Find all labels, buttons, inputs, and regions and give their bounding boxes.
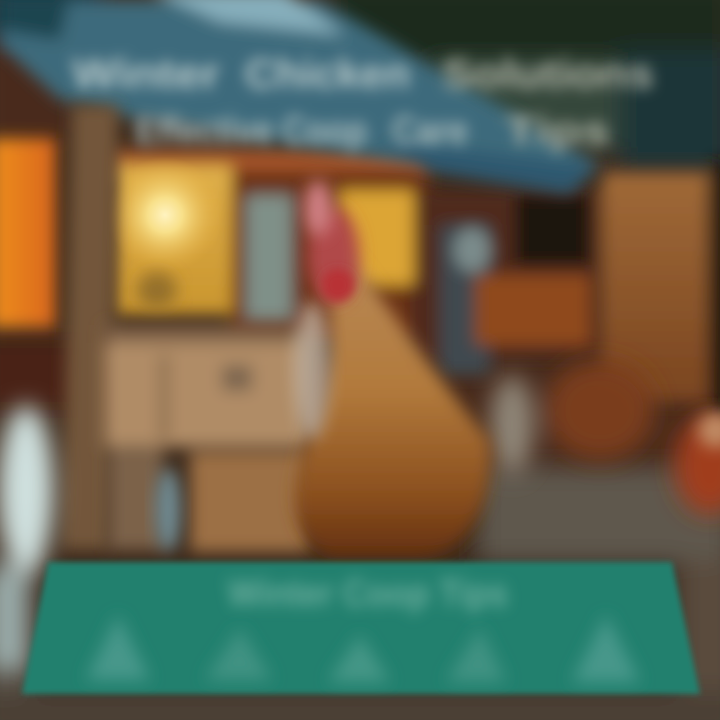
title: Care [392,109,468,153]
blue bottle [155,468,181,552]
icon: tree four [446,628,506,682]
hen highlight right [698,412,720,448]
panel heading: Winter Coop Tips [228,573,508,615]
hen wattle [322,269,354,301]
window: left orange [0,138,56,328]
window: dark pane [440,225,490,375]
coop wall and windows [0,138,720,420]
lamp base [137,272,177,308]
window: lit centre [114,165,232,315]
title: Solutions [442,50,654,97]
hen head [307,207,359,303]
wooden crate [104,325,310,552]
hen breast pale [294,300,330,440]
main hen [294,180,491,558]
orange glow right [475,275,590,345]
icon: tree five [572,615,640,682]
left white hen [0,405,54,670]
lamp glow [107,157,223,273]
window: pale pane [246,195,292,320]
title: Effective Coop [135,109,367,153]
door panel right [602,172,708,402]
wooden post [62,105,118,550]
icon: tree one [86,615,150,680]
icon: tree two [205,628,272,680]
hen comb [304,180,332,236]
title: Winter [72,50,220,97]
title: Chicken [245,50,410,97]
dark gap [515,195,590,265]
title [72,50,654,153]
panel: green banner [22,562,700,694]
title: Tips [505,109,610,153]
window: right of hen [340,190,414,285]
icon: tree three [328,635,390,682]
right background hens [490,360,720,515]
roof [0,0,600,195]
